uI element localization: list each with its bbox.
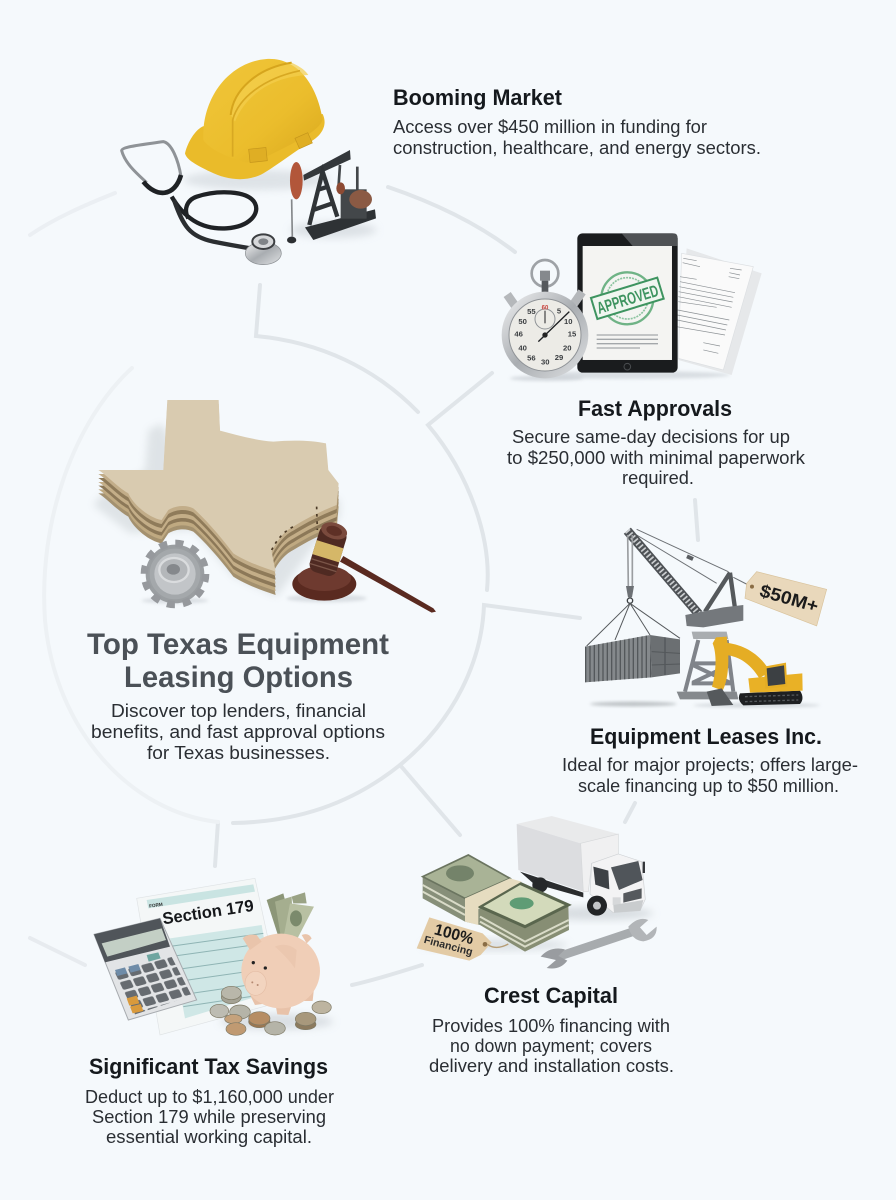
description: construction, healthcare, and energy sectors. — [393, 138, 761, 158]
heading: Fast Approvals — [578, 396, 732, 421]
illustration: stopwatch, tablet, papers: 30 — [541, 357, 550, 366]
description: Secure same-day decisions for up — [512, 427, 790, 447]
subtitle: for Texas businesses. — [147, 743, 330, 763]
illustration: stopwatch, tablet, papers: 20 — [563, 344, 572, 353]
illustration: stopwatch, tablet, papers — [502, 233, 762, 381]
description: Access over $450 million in funding for — [393, 117, 707, 137]
illustration: cash stacks, truck, wrench, financing tag: 100% — [432, 921, 475, 948]
heading: Crest Capital — [484, 983, 618, 1008]
description: Ideal for major projects; offers large- — [562, 755, 858, 775]
description: Provides 100% financing with — [432, 1016, 670, 1036]
illustration: stopwatch, tablet, papers: 56 — [527, 354, 536, 363]
description: to $250,000 with minimal paperwork — [507, 448, 806, 468]
ring and connector lines — [30, 187, 698, 985]
illustration: hard hat, stethoscope, pumpjack — [122, 59, 377, 265]
panel: significant tax savings — [85, 878, 334, 1147]
illustration: calculator, section 179 form, piggy bank, coins: FORM — [149, 902, 163, 909]
panel: booming market — [122, 59, 761, 265]
illustration: stopwatch, tablet, papers: 55 — [527, 307, 536, 316]
title: Top Texas Equipment — [87, 628, 389, 661]
illustration: stopwatch, tablet, papers: 50 — [518, 317, 527, 326]
description: Deduct up to $1,160,000 under — [85, 1087, 334, 1107]
description: essential working capital. — [106, 1127, 312, 1147]
illustration: stopwatch, tablet, papers: 5 — [557, 306, 562, 315]
heading: Significant Tax Savings — [89, 1054, 328, 1079]
description: required. — [622, 468, 694, 488]
panel: fast approvals — [502, 233, 806, 488]
description: scale financing up to $50 million. — [578, 776, 839, 796]
illustration: stopwatch, tablet, papers: 40 — [518, 344, 527, 353]
illustration: cash stacks, truck, wrench, financing tag — [417, 816, 657, 969]
panel: top texas equipment leasing options — [87, 400, 436, 763]
description: Section 179 while preserving — [92, 1107, 326, 1127]
illustration: stopwatch, tablet, papers: 10 — [564, 317, 573, 326]
illustration: crane, container, excavator, price tag — [585, 529, 827, 708]
description: no down payment; covers — [450, 1036, 652, 1056]
subtitle: Discover top lenders, financial — [111, 701, 366, 721]
illustration: stopwatch, tablet, papers: 60 — [542, 305, 549, 311]
illustration: stopwatch, tablet, papers: 46 — [514, 330, 523, 339]
panel: equipment leases inc — [562, 529, 858, 796]
illustration: stopwatch, tablet, papers: 29 — [555, 353, 563, 362]
heading: Equipment Leases Inc. — [590, 724, 822, 749]
illustration: crane, container, excavator, price tag: $50M+ — [758, 581, 821, 616]
illustration: stopwatch, tablet, papers: APPROVED — [595, 281, 661, 318]
illustration: calculator, section 179 form, piggy bank, coins: Section 179 — [161, 896, 255, 928]
title: Leasing Options — [124, 661, 353, 694]
illustration: cash stacks, truck, wrench, financing tag: Financing — [423, 934, 474, 958]
description: delivery and installation costs. — [429, 1056, 674, 1076]
illustration: texas map, gear, gavel — [93, 400, 436, 613]
illustration: stopwatch, tablet, papers: 15 — [568, 330, 577, 339]
panel: crest capital — [417, 816, 674, 1076]
illustration: calculator, section 179 form, piggy bank, coins — [94, 878, 333, 1035]
heading: Booming Market — [393, 85, 563, 110]
subtitle: benefits, and fast approval options — [91, 722, 385, 742]
